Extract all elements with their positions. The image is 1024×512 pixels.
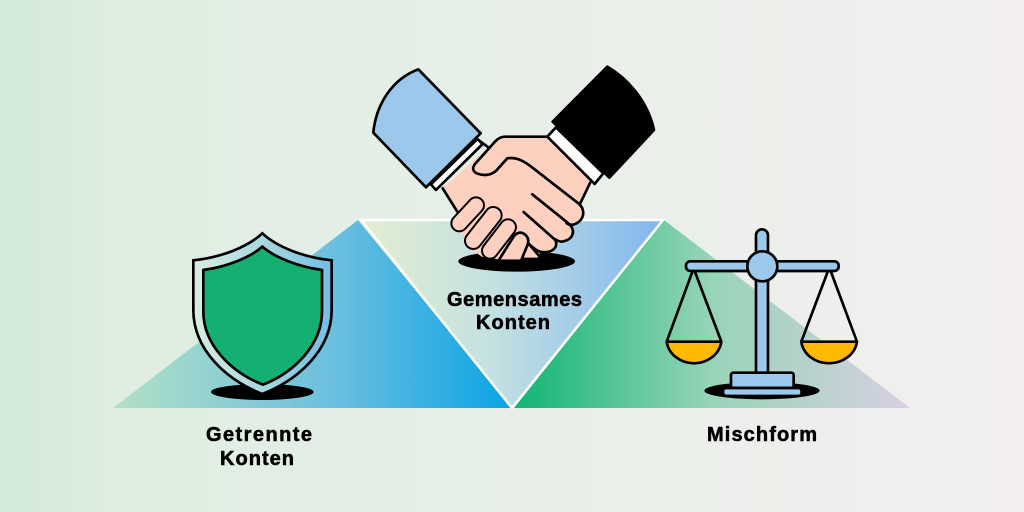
icon: right sleeve — [553, 67, 654, 178]
label: Getrennte Konten: Getrennte — [206, 424, 312, 446]
panel: middle inverted triangle — [361, 220, 663, 408]
panel: left triangle — [113, 220, 512, 408]
icon: left cuff — [431, 139, 483, 190]
icon: shield — [193, 233, 332, 400]
label: Getrennte Konten — [206, 424, 312, 470]
icon: scales — [667, 229, 857, 399]
label: Getrennte Konten: Konten — [220, 448, 294, 470]
icon: handshake — [373, 67, 654, 272]
label: Gemensames Konten — [447, 289, 582, 334]
fingers — [459, 205, 528, 259]
icon: right cuff — [547, 127, 603, 184]
icon: left sleeve — [373, 69, 481, 187]
label: Mischform: Mischform — [707, 424, 817, 446]
label: Gemensames Konten: Gemensames — [447, 289, 582, 311]
label: Gemensames Konten: Konten — [476, 312, 550, 334]
panel: right triangle — [514, 220, 910, 408]
